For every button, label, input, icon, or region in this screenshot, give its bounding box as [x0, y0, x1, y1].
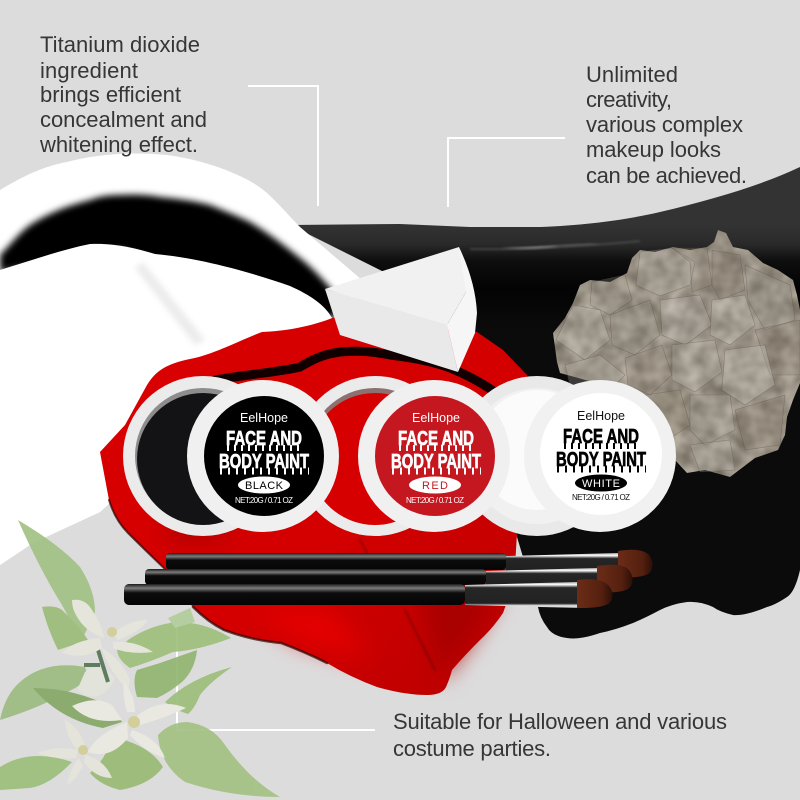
red paint swatch	[100, 317, 527, 695]
text block: creativity: makeup looks	[586, 137, 721, 162]
flower 1	[62, 600, 153, 690]
net weight: NET:20G / 0.71 OZ	[572, 493, 630, 502]
brand: EelHope	[412, 410, 460, 425]
orange blossom sprig	[0, 520, 280, 797]
flower centres	[78, 627, 140, 755]
jar base: white	[457, 376, 617, 536]
sponge side face	[447, 247, 477, 372]
product name: BODY PAINT	[219, 451, 309, 473]
brush 1	[166, 550, 652, 577]
jar lid: red	[358, 380, 510, 532]
text block: creativity	[586, 62, 747, 188]
red shading	[160, 510, 500, 680]
sponge front face	[325, 289, 458, 372]
product name: FACE AND	[563, 426, 639, 448]
product name	[391, 428, 481, 473]
product name	[556, 426, 646, 471]
makeup sponge	[325, 247, 477, 372]
black stroke across white swatch	[0, 195, 338, 320]
text block: creativity: can be achieved.	[586, 163, 747, 188]
bottom leader line	[177, 622, 375, 730]
dark folds in red paint	[109, 351, 492, 670]
brush 2	[145, 565, 632, 592]
colour tag: RED	[422, 480, 448, 492]
leaves	[0, 520, 280, 797]
text block: titanium dioxide: ingredient	[40, 58, 138, 83]
text block: suitable occasions: Suitable for Halloween and various	[393, 709, 727, 734]
text block: titanium dioxide: brings efficient	[40, 82, 181, 107]
jar lid: white	[524, 380, 676, 532]
text block: suitable occasions: costume parties.	[393, 736, 551, 761]
text block: titanium dioxide: Titanium dioxide	[40, 32, 200, 57]
net weight: NET:20G / 0.71 OZ	[235, 496, 293, 505]
colour tag	[575, 474, 627, 492]
flower 3	[37, 720, 112, 785]
text block: titanium dioxide: concealment and	[40, 107, 207, 132]
product name: BODY PAINT	[556, 449, 646, 471]
brand: EelHope	[240, 410, 288, 425]
colour tag	[238, 476, 290, 494]
text block: suitable occasions	[393, 709, 727, 761]
text block: titanium dioxide	[39, 32, 207, 157]
text block: creativity: creativity,	[586, 87, 672, 112]
brand: EelHope	[577, 408, 625, 423]
brush 3	[124, 579, 612, 608]
jar lid: black	[187, 380, 339, 532]
leader line: creativity	[448, 138, 565, 207]
text block: creativity: various complex	[586, 112, 743, 137]
text block: creativity: Unlimited	[586, 62, 678, 87]
net weight: NET:20G / 0.71 OZ	[406, 496, 464, 505]
product name: FACE AND	[398, 428, 474, 450]
flake powder pile	[553, 230, 800, 477]
leader line: titanium dioxide	[248, 86, 318, 206]
product name: FACE AND	[226, 428, 302, 450]
sponge top face	[325, 247, 466, 325]
text block: titanium dioxide: whitening effect.	[39, 132, 198, 157]
jar base: red	[295, 376, 455, 536]
colour tag: WHITE	[582, 478, 620, 490]
white paint swatch	[0, 153, 362, 565]
stem	[78, 667, 115, 697]
colour tag: BLACK	[245, 480, 284, 492]
product name: BODY PAINT	[391, 451, 481, 473]
colour tag	[409, 476, 461, 494]
black paint swatch	[290, 167, 800, 638]
product name	[219, 428, 309, 473]
flower 2	[72, 682, 186, 758]
jar base: black	[123, 376, 283, 536]
